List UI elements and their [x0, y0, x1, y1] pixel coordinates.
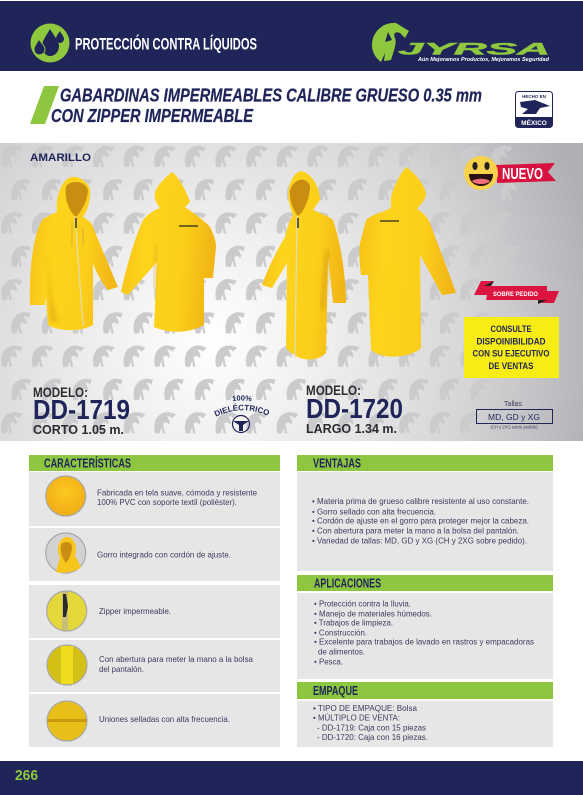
sizes box: (CH y 2XG sobre pedido) [490, 424, 538, 430]
aplicaciones list: • Construcción. [314, 628, 367, 637]
panel: product photo [0, 143, 583, 441]
feature: tela PVC: Fabricada en tela suave, cómoda y resistente [97, 488, 258, 498]
main title: GABARDINAS IMPERMEABLES CALIBRE GRUESO 0.35 mm [60, 86, 482, 106]
main title [51, 86, 482, 126]
heading: empaque: EMPAQUE [313, 684, 358, 698]
aplicaciones list: • Excelente para trabajos de lavado en rastros y empacadoras [314, 638, 534, 647]
heading: aplicaciones: APLICACIONES [314, 576, 381, 590]
callout: consulte disponibilidad: DISPOINIBILIDAD [476, 336, 546, 346]
aplicaciones list: • Manejo de materiales húmedos. [314, 609, 432, 618]
icon: liquid drops badge [30, 24, 70, 62]
feature: zipper [29, 585, 280, 638]
ribbon: sobre pedido: SOBRE PEDIDO [493, 291, 538, 298]
callout: consulte disponibilidad [464, 317, 559, 378]
callout: consulte disponibilidad: DE VENTAS [488, 361, 534, 371]
icon: smiley with NUEVO ribbon: NUEVO [502, 166, 543, 183]
heading: características [29, 455, 280, 471]
heading: empaque [297, 682, 553, 699]
JYRSA logo [372, 23, 550, 63]
aplicaciones list: • Pesca. [314, 657, 343, 666]
JYRSA logo: JYRSA [398, 40, 550, 58]
raincoat DD-1720 back [359, 167, 456, 357]
panel: aplicaciones [297, 575, 553, 679]
dielectric seal [214, 395, 270, 434]
product label: amarillo: AMARILLO [30, 152, 91, 164]
feature: uniones [29, 694, 280, 747]
panel: empaque [297, 682, 553, 747]
ventajas list: • Gorro sellado con alta frecuencia. [312, 507, 436, 516]
model block: DD-1720: DD-1720 [306, 393, 403, 424]
model block: DD-1720: LARGO 1.34 m. [306, 421, 397, 436]
ventajas list: • Cordón de ajuste en el gorro para proteger mejor la cabeza. [312, 517, 529, 526]
model block: DD-1719: CORTO 1.05 m. [33, 422, 124, 437]
top navy banner [0, 1, 583, 71]
model block: DD-1720 [306, 382, 403, 436]
raincoat DD-1720 front [262, 171, 346, 360]
model block: DD-1720: MODELO: [306, 382, 361, 398]
feature: zipper: Zipper impermeable. [99, 607, 171, 616]
feature: tela PVC: 100% PVC con soporte textil (poliéster). [97, 498, 237, 507]
ventajas list [312, 497, 529, 545]
sizes box: MD, GD y XG [488, 412, 540, 422]
raincoat DD-1719 back [121, 172, 216, 332]
callout: consulte disponibilidad: CONSULTE [490, 324, 532, 334]
heading: ventajas: VENTAJAS [313, 456, 361, 470]
sizes box [476, 401, 552, 430]
green title slash [30, 86, 59, 124]
dielectric seal: DIELÉCTRICO [214, 404, 270, 416]
empaque list: - DD-1720: Caja con 16 piezas. [317, 733, 428, 742]
empaque list: - DD-1719: Caja con 15 piezas [317, 724, 426, 733]
badge: hecho en México: MÉXICO [521, 118, 547, 127]
aplicaciones list: • Protección contra la lluvia. [314, 599, 411, 608]
panel: ventajas [297, 455, 553, 571]
ventajas list: • Materia prima de grueso calibre resistente al uso constante. [312, 497, 529, 506]
empaque list [313, 704, 428, 742]
main title: CON ZIPPER IMPERMEABLE [51, 106, 254, 126]
JYRSA logo: Aún Mejoramos Productos, Mejoramos Seguridad [417, 57, 550, 63]
dielectric seal: 100% [232, 395, 252, 402]
feature: abertura: del pantalón. [99, 665, 144, 674]
model block: DD-1719: MODELO: [33, 384, 88, 400]
feature: abertura [29, 640, 280, 692]
ribbon: sobre pedido [474, 281, 559, 304]
empaque list: • TIPO DE EMPAQUE: Bolsa [313, 704, 418, 713]
model block: DD-1719: DD-1719 [33, 394, 130, 425]
ventajas list: • Con abertura para meter la mano a la bolsa del pantalón. [312, 526, 519, 535]
icon: smiley with NUEVO ribbon [464, 156, 556, 190]
aplicaciones list: • Trabajos de limpieza. [314, 619, 393, 628]
badge: hecho en México [516, 92, 552, 128]
sizes box: Tallas [504, 401, 522, 408]
ventajas list: • Variedad de tallas: MD, GD y XG (CH y 2XG sobre pedido). [312, 536, 527, 545]
empaque list: • MÚLTIPLO DE VENTA: [313, 713, 400, 722]
feature: gorro [29, 528, 280, 581]
feature: uniones: Uniones selladas con alta frecuencia. [99, 715, 230, 724]
feature: abertura: Con abertura para meter la mano a la bolsa [99, 655, 254, 664]
aplicaciones list [314, 599, 534, 666]
raincoat DD-1719 front [30, 177, 118, 330]
heading: aplicaciones [297, 575, 553, 591]
page number: 266 [15, 767, 38, 784]
panel: características [29, 455, 280, 747]
callout: consulte disponibilidad: CON SU EJECUTIVO [472, 348, 550, 358]
footer navy bar [0, 761, 583, 795]
feature: tela PVC [29, 472, 280, 526]
aplicaciones list: de alimentos. [318, 647, 365, 656]
heading: ventajas [297, 455, 553, 471]
model block: DD-1719 [33, 384, 130, 437]
section title: protección contra líquidos: PROTECCIÓN CONTRA LÍQUIDOS [75, 34, 257, 54]
badge: hecho en México: HECHO EN [522, 94, 546, 99]
feature: gorro: Gorro integrado con cordón de ajuste. [97, 550, 231, 560]
heading: características: CARACTERÍSTICAS [44, 456, 131, 470]
